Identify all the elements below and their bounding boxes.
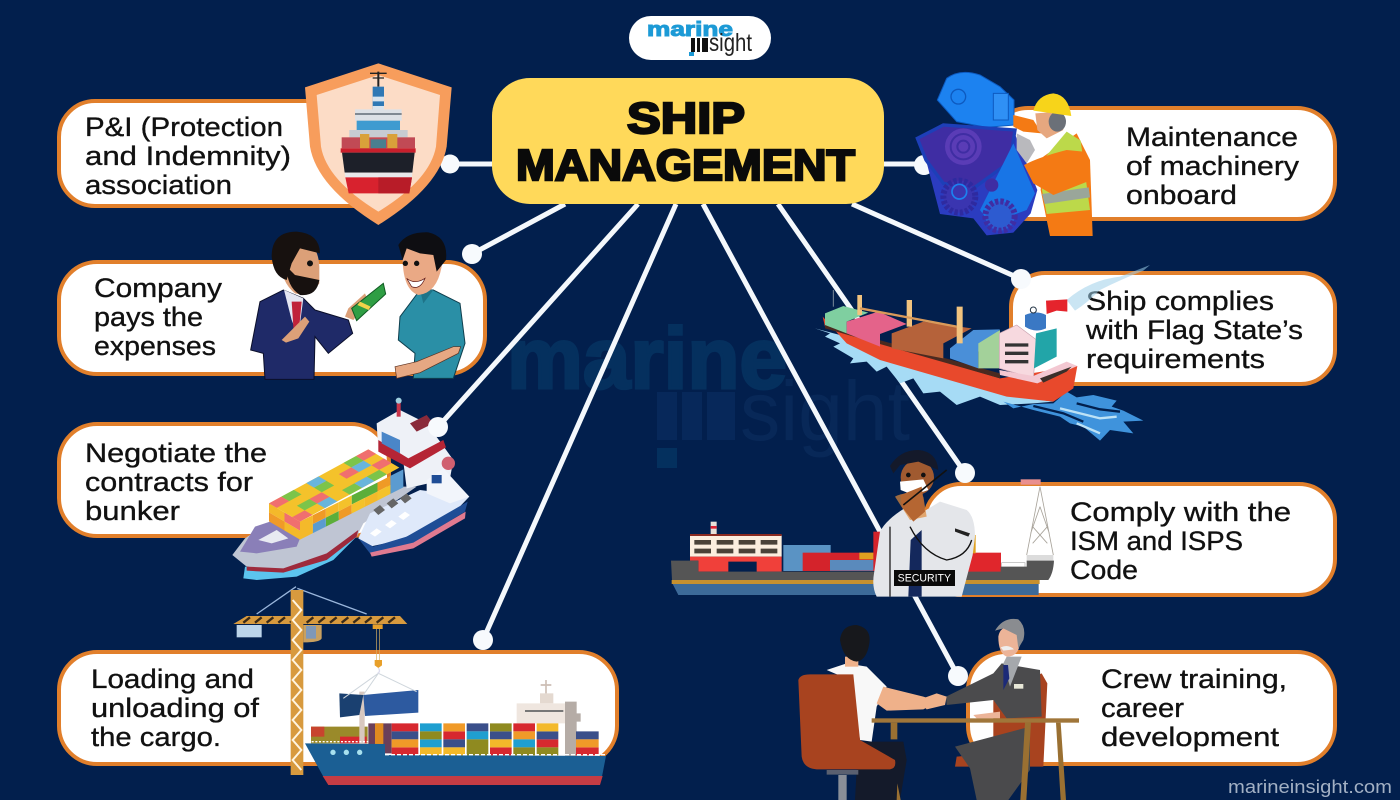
watermark logo: marine (507, 311, 787, 407)
icon: ship behind security officer (671, 479, 1054, 595)
panel text: the cargo. (91, 722, 221, 752)
icon: shield with ship (305, 63, 452, 225)
panel box (59, 101, 404, 206)
panel text (1085, 286, 1303, 374)
panel box (968, 652, 1335, 764)
logo badge: sight (709, 29, 752, 57)
hull (823, 317, 1077, 402)
panel box (1011, 273, 1335, 384)
panel text: and Indemnity) (85, 141, 291, 171)
icon: handshake interview (798, 619, 1079, 800)
panel text: Crew training, (1101, 664, 1287, 694)
panel: maintenance (990, 108, 1335, 219)
ship body (671, 522, 1054, 595)
logo badge: marine (647, 19, 733, 41)
man in teal shirt (395, 232, 465, 378)
panel text: unloading of (91, 693, 260, 723)
panel text: with Flag State’s (1085, 315, 1303, 345)
flags (1025, 299, 1067, 330)
table (872, 718, 1079, 800)
panel: flag state (1011, 273, 1335, 384)
left chair and candidate (798, 625, 938, 800)
panel text: of machinery (1126, 151, 1300, 181)
panel text: Company (94, 273, 223, 303)
right chair (955, 673, 1047, 767)
title text: SHIP (627, 94, 745, 143)
panel: loading cargo (59, 652, 617, 764)
title text (516, 94, 855, 190)
container stack (269, 503, 300, 540)
icon: engine (917, 72, 1037, 235)
engine lower (980, 143, 1035, 223)
panel text: ISM and ISPS (1070, 526, 1243, 556)
panel text (1101, 664, 1287, 752)
security badge (894, 570, 955, 586)
security badge: SECURITY (898, 573, 952, 585)
panel text (85, 112, 291, 200)
engine body fill (926, 130, 1037, 235)
connector lines (438, 164, 1021, 676)
tower crane (233, 587, 407, 775)
wave spray over panel (1067, 265, 1150, 311)
panel text: onboard (1126, 180, 1237, 210)
icon: security officer (873, 450, 975, 597)
panel box (59, 652, 617, 764)
connector dot: negotiate (428, 417, 448, 437)
panel text (91, 664, 260, 752)
panel: ISM and ISPS (925, 484, 1335, 595)
panel: negotiate contracts (59, 424, 389, 536)
panel box (990, 108, 1335, 219)
panel text: Negotiate the (85, 438, 267, 468)
panel box (59, 424, 389, 536)
panel text: association (85, 170, 232, 200)
watermark logo (507, 311, 910, 468)
panel text: Code (1070, 555, 1138, 585)
panel text: Maintenance (1126, 122, 1298, 152)
icon: two men exchanging money (251, 232, 465, 379)
panel text: bunker (85, 496, 180, 526)
superstructure (377, 398, 455, 488)
deck containers (825, 295, 1000, 368)
panel box (59, 262, 485, 374)
engine upper block (937, 72, 1014, 127)
panel text (1126, 122, 1300, 210)
superstructure (999, 325, 1077, 383)
panel text (1070, 497, 1291, 585)
panel text: requirements (1086, 344, 1265, 374)
icon: bunker ships (232, 398, 469, 580)
panel text: development (1101, 722, 1280, 752)
icon: ship in flag state colours with waves (815, 265, 1150, 441)
connector dot: flag state (1011, 269, 1031, 289)
watermark logo: sight (740, 364, 910, 458)
panel box (925, 484, 1335, 595)
bunker barge (358, 468, 469, 557)
panel text (85, 438, 267, 526)
waves (815, 328, 1053, 405)
panel text: contracts for (85, 467, 253, 497)
panel text: Ship complies (1086, 286, 1274, 316)
manager (918, 619, 1042, 800)
connector dots under art (440, 154, 975, 686)
title text: MANAGEMENT (516, 141, 855, 190)
panel text: Comply with the (1070, 497, 1291, 527)
container ship hull (232, 487, 417, 580)
lattice tower (1021, 479, 1053, 561)
panel text: expenses (94, 331, 216, 361)
icon: crane and cargo ship (233, 587, 606, 785)
panel: P&I association (59, 101, 404, 206)
man in suit (251, 232, 386, 379)
engine middle (917, 125, 1015, 188)
panel text: P&I (Protection (85, 112, 283, 142)
container ship (305, 680, 606, 785)
website credit: marineinsight.com (1228, 777, 1392, 797)
title box (492, 78, 884, 204)
panel text: career (1101, 693, 1184, 723)
icon: maintenance worker (1013, 93, 1093, 236)
logo badge (629, 16, 771, 60)
hanging container (339, 673, 418, 717)
panel text (94, 273, 223, 361)
panel text: Loading and (91, 664, 254, 694)
panel text: pays the (94, 302, 203, 332)
panel: company pays (59, 262, 485, 374)
panel: crew training (968, 652, 1335, 764)
